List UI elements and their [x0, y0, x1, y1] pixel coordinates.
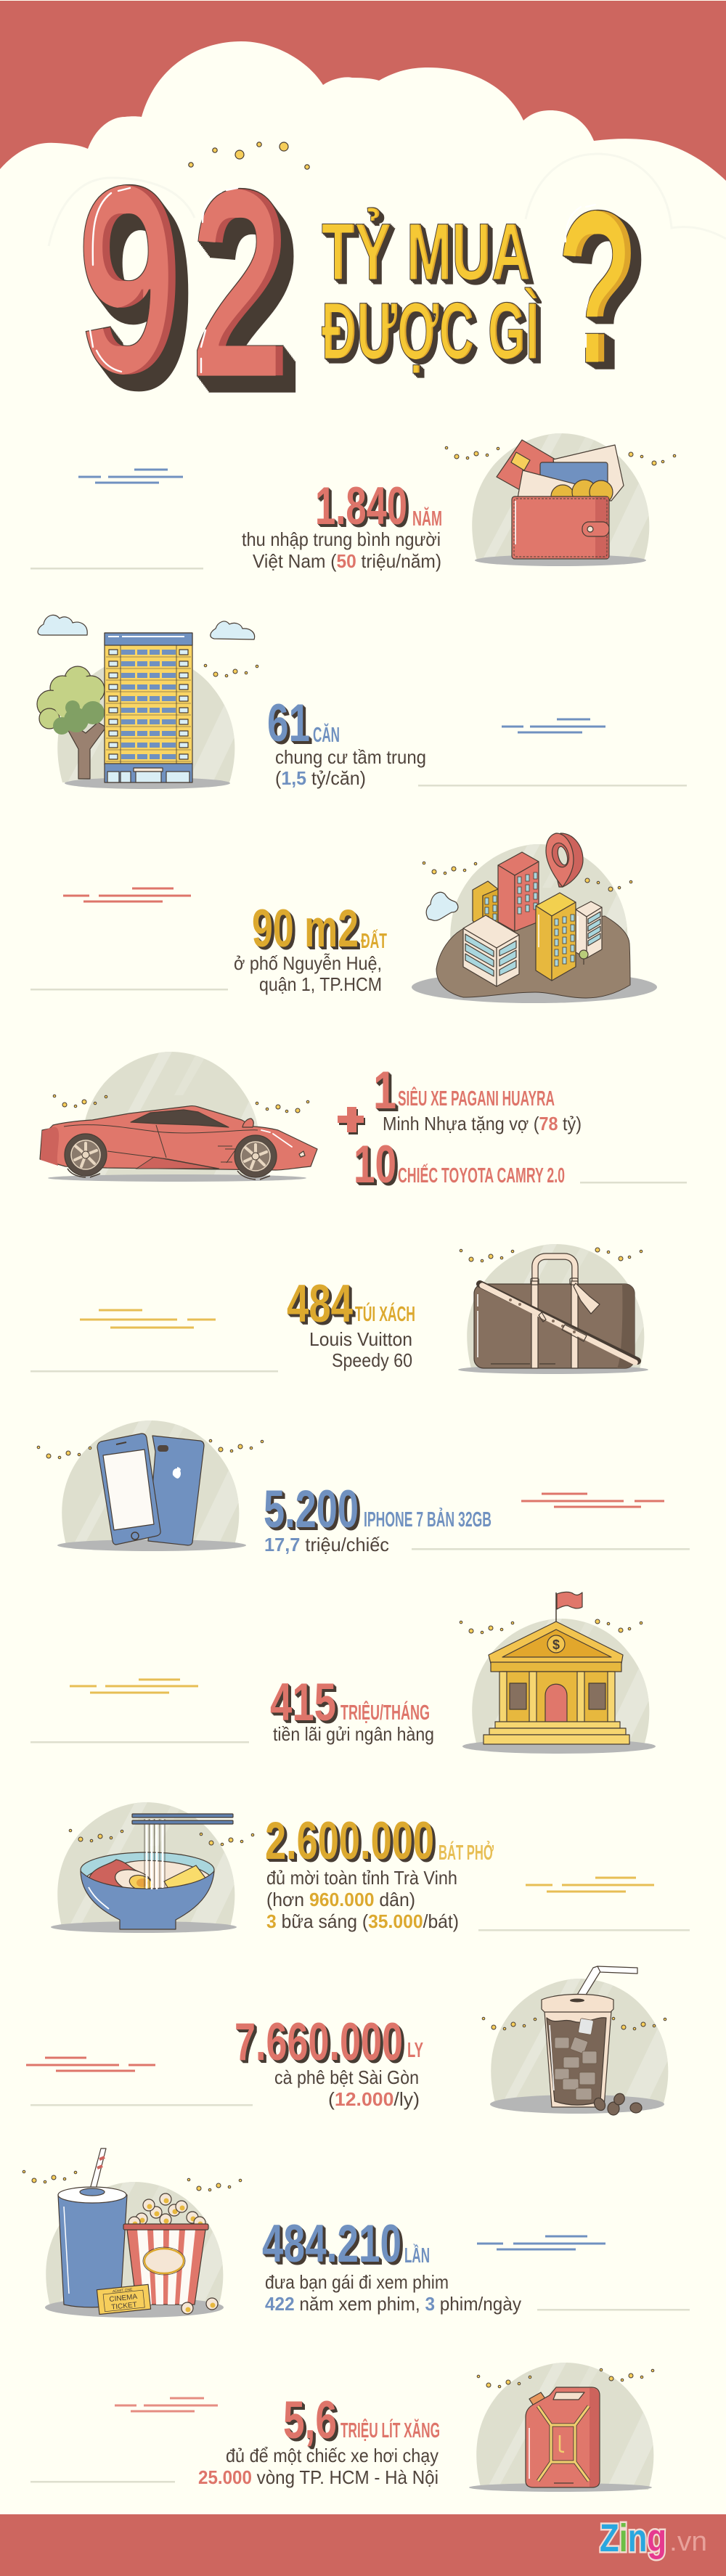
- description: đủ mời toàn tỉnh Trà Vinh: [266, 1867, 457, 1889]
- header: red sky with cloud: [0, 1, 726, 246]
- item 10: movie snacks, 484.210 lần: [23, 2148, 690, 2318]
- stat label Pagani: SIÊU XE PAGANI HUAYRA: [398, 1086, 555, 1111]
- stat unit: TÚI XÁCH: [355, 1301, 415, 1326]
- item 2: apartment building, 61 căn: [37, 615, 687, 789]
- header sparkle dots: [189, 142, 309, 169]
- baseline rule: [30, 1370, 278, 1372]
- description line 2: Speedy 60: [332, 1349, 412, 1371]
- sparkle dots right: [595, 1248, 643, 1261]
- stat unit: TRIỆU LÍT XĂNG: [340, 2418, 440, 2442]
- icon: cup, popcorn and ticket: ADMIT ONE: [113, 2288, 133, 2294]
- icon: iced coffee cup: [490, 1966, 686, 2115]
- description: tiền lãi gửi ngân hàng: [273, 1723, 434, 1745]
- icon: travel bag: [458, 1244, 662, 1374]
- baseline rule: [580, 1182, 687, 1183]
- icon: building and tree: [37, 633, 253, 789]
- streaks: [115, 2397, 218, 2413]
- description line 2: quận 1, TP.HCM: [259, 973, 382, 995]
- sparkle dots: [460, 1249, 514, 1262]
- stat unit: LẦN: [404, 2243, 430, 2268]
- stat unit: LY: [407, 2039, 423, 2062]
- description: ở phố Nguyễn Huệ,: [234, 952, 382, 974]
- icon: bank building: [462, 1592, 667, 1754]
- icon: small cloud: [426, 892, 458, 920]
- sparkle dots: [445, 446, 499, 459]
- footer band with Zing.vn logo: [0, 2514, 726, 2576]
- icon: supercar: [40, 1052, 317, 1182]
- title number 92: 2: [191, 134, 290, 433]
- sparkle dots right: [612, 2017, 666, 2030]
- baseline rule: [478, 1929, 690, 1931]
- item 6: iPhone, 5.200 iPhone 7: [37, 1420, 690, 1555]
- description line 2: 25.000 vòng TP. HCM - Hà Nội: [198, 2466, 439, 2488]
- title question mark: ?: [557, 165, 639, 409]
- sparkle dots: [69, 1829, 123, 1842]
- streaks: [63, 887, 191, 903]
- stat number: 484: [287, 1275, 353, 1333]
- description: Louis Vuitton: [309, 1328, 412, 1350]
- icon: plus sign: [338, 1107, 365, 1134]
- baseline rule: [30, 1741, 249, 1743]
- icon: cloud right: [211, 621, 255, 639]
- title text line 2: ĐƯỢC GÌ: [322, 287, 539, 376]
- icon: cup, popcorn and ticket: TICKET: [111, 2301, 137, 2312]
- streaks: [70, 1678, 198, 1694]
- sparkle dots right: [600, 2368, 654, 2381]
- stat number: 5.200: [264, 1480, 359, 1539]
- description line 2: (1,5 tỷ/căn): [275, 767, 366, 789]
- stat unit: BÁT PHỞ: [439, 1840, 494, 1865]
- baseline rule: [30, 568, 203, 569]
- item 4: supercar, 1 siêu xe + 10 Camry: [40, 1052, 687, 1194]
- icon: iPhones: [57, 1420, 257, 1551]
- streaks: [477, 2236, 605, 2250]
- sparkle dots: [482, 2017, 537, 2030]
- stat number: 61: [267, 694, 310, 753]
- stat number 10: 10: [354, 1135, 396, 1194]
- description: Minh Nhựa tặng vợ (78 tỷ): [383, 1113, 582, 1134]
- item 9: iced coffee, 7.660.000 ly: [26, 1966, 686, 2115]
- baseline rule: [30, 2104, 253, 2106]
- sparkle dots: [477, 2375, 531, 2388]
- streaks: [78, 469, 183, 483]
- stat unit: CĂN: [313, 723, 340, 747]
- stat unit: TRIỆU/THÁNG: [340, 1700, 430, 1725]
- description line 2: (hơn 960.000 dân): [266, 1889, 415, 1910]
- sparkle dots: [423, 862, 477, 875]
- icon: jerry can: [469, 2363, 672, 2492]
- description: thu nhập trung bình người: [242, 528, 441, 550]
- description: đủ để một chiếc xe hơi chạy: [226, 2445, 439, 2466]
- icon: cup, popcorn and ticket: [45, 2148, 241, 2318]
- stat label Camry: CHIẾC TOYOTA CAMRY 2.0: [398, 1163, 565, 1187]
- streaks: [502, 719, 605, 733]
- logo: Zing.vn: .vn: [669, 2527, 707, 2557]
- description: chung cư tầm trung: [275, 746, 426, 768]
- title: [77, 130, 639, 433]
- baseline rule: [412, 1548, 690, 1550]
- stat number: 2.600.000: [265, 1812, 434, 1870]
- baseline rule: [418, 785, 687, 787]
- sparkle dots right: [585, 878, 632, 891]
- sparkle dots: [37, 1446, 91, 1459]
- sparkle dots right: [187, 2178, 242, 2191]
- streaks: [80, 1309, 216, 1328]
- description line 2: (12.000/ly): [328, 2088, 420, 2110]
- sparkle dots right: [256, 1100, 309, 1113]
- stat unit: NĂM: [412, 507, 442, 531]
- title number 92: 9: [77, 130, 183, 430]
- streaks: [521, 1492, 664, 1508]
- stat number: 90 m2: [252, 899, 359, 958]
- icon: cup, popcorn and ticket: CINEMA: [109, 2293, 138, 2304]
- description line 3: 3 bữa sáng (35.000/bát): [266, 1910, 459, 1932]
- logo: Zing.vn: Zing: [600, 2516, 666, 2560]
- stat number 1: 1: [373, 1061, 396, 1120]
- description line 2: Việt Nam (50 triệu/năm): [253, 550, 441, 572]
- stat number: 1.840: [315, 477, 407, 536]
- stat number: 415: [270, 1673, 336, 1732]
- stat number: 7.660.000: [234, 2013, 403, 2072]
- item 7: bank, 415 triệu/tháng: [30, 1592, 667, 1754]
- sparkle dots: [460, 1621, 514, 1634]
- title number 92: [77, 130, 290, 433]
- icon: city on island with map pin: [412, 833, 657, 1003]
- streaks: [526, 1877, 654, 1893]
- icon: bank building: $: [552, 1637, 560, 1652]
- logo: Zing.vn: [600, 2516, 707, 2560]
- description line 2: 422 năm xem phim, 3 phim/ngày: [265, 2293, 521, 2315]
- item 1: wallet, 1.840 năm: [30, 433, 676, 572]
- title text line 1: TỶ MUA: [322, 208, 531, 297]
- item 8: pho bowl, 2.600.000 bát phở: [51, 1802, 690, 1933]
- baseline rule: [30, 989, 228, 990]
- sparkle dots: [23, 2170, 77, 2183]
- item 11: jerry can, 5,6 triệu lít xăng: [30, 2363, 672, 2492]
- icon: noodle bowl: [51, 1802, 253, 1933]
- sparkle dots right: [629, 452, 676, 465]
- baseline rule: [537, 2309, 690, 2311]
- stat number: 484.210: [262, 2215, 401, 2273]
- sparkle dots right: [209, 1439, 264, 1452]
- baseline rule: [30, 2481, 175, 2482]
- description: cà phê bệt Sài Gòn: [274, 2066, 419, 2088]
- stat unit: ĐẤT: [361, 928, 387, 953]
- item 5: Louis Vuitton bag, 484 túi xách: [30, 1244, 662, 1374]
- sparkle dots right: [595, 1619, 643, 1632]
- stat unit: IPHONE 7 BẢN 32GB: [364, 1507, 492, 1532]
- streaks: [26, 2057, 155, 2072]
- stat number: 5,6: [283, 2391, 337, 2450]
- sparkle dots: [204, 664, 258, 677]
- item 3: city block, 90 m2 đất: [30, 833, 657, 1003]
- description: 17,7 triệu/chiếc: [264, 1534, 389, 1555]
- sparkle dots right: [200, 1833, 254, 1846]
- description: đưa bạn gái đi xem phim: [265, 2271, 449, 2293]
- sparkle dots: [53, 1095, 107, 1108]
- icon: wallet: [472, 433, 667, 566]
- icon: cloud left: [38, 615, 87, 635]
- title question mark: [557, 165, 639, 409]
